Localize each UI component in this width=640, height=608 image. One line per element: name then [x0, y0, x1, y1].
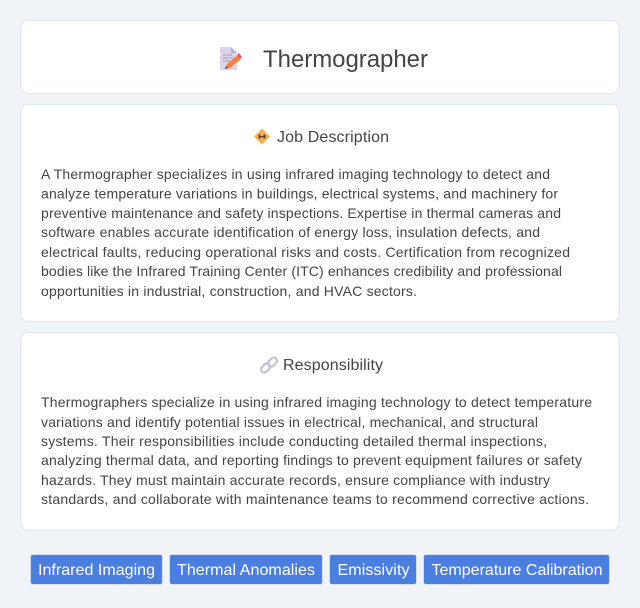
text block: responsibility: Thermographers specialize in using infrared imaging technology to detect temperature	[41, 394, 592, 410]
text block: responsibility: variations and identify potential issues in electrical, mechanical, and structural	[41, 414, 538, 430]
text block: job description: A Thermographer specializes in using infrared imaging technology to detect and	[41, 166, 550, 182]
heading: job description: Job Description	[277, 129, 389, 146]
tag: emissivity: Emissivity	[338, 562, 410, 579]
text block: responsibility: hazards. They must maintain accurate records, ensure compliance with industry	[41, 472, 550, 488]
text block: job description: bodies like the Infrared Training Center (ITC) enhances credibility and professional	[41, 263, 562, 279]
text block: job description: preventive maintenance and safety inspections. Expertise in thermal cameras and	[41, 205, 561, 221]
text block: responsibility: standards, and collaborate with maintenance teams to recommend corrective actions.	[41, 491, 589, 507]
icon: chain link	[260, 356, 278, 374]
icon: warning sign	[254, 128, 270, 144]
tag: temperature calibration	[424, 554, 610, 584]
tag: thermal anomalies: Thermal Anomalies	[177, 562, 315, 579]
text block: job description: software enables accurate identification of energy loss, insulation defects, and	[41, 224, 540, 240]
heading: responsibility: Responsibility	[283, 357, 383, 374]
text block: job description: analyze temperature variations in buildings, electrical systems, and machinery for	[41, 186, 558, 202]
panel: title card	[20, 20, 620, 94]
tag: thermal anomalies	[170, 554, 322, 584]
text block: job description: opportunities in industrial, construction, and HVAC sectors.	[41, 283, 417, 299]
text block: job description: electrical faults, reducing operational risks and costs. Certification from recognized	[41, 244, 570, 260]
tag: infrared imaging	[30, 554, 162, 584]
panel: responsibility	[20, 332, 620, 530]
title: Thermographer	[263, 46, 428, 73]
panel: job description	[20, 104, 620, 322]
tag: infrared imaging: Infrared Imaging	[38, 562, 155, 579]
tag: temperature calibration: Temperature Calibration	[432, 562, 602, 579]
text block: responsibility	[41, 394, 592, 507]
icon: document with pencil	[220, 47, 242, 70]
text block: responsibility: systems. Their responsibilities include conducting detailed thermal inspections,	[41, 433, 547, 449]
text block: job description	[41, 166, 570, 299]
tag: emissivity	[330, 554, 416, 584]
text block: responsibility: analyzing thermal data, and reporting findings to prevent equipment failures or safety	[41, 452, 582, 468]
